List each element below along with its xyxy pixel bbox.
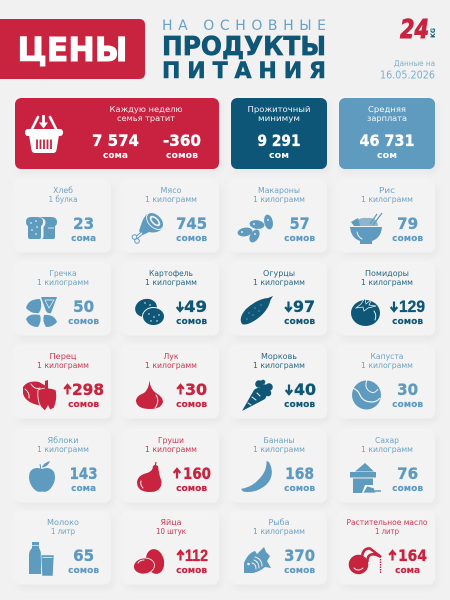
icon: buckwheat grains: [26, 297, 57, 327]
card: cucumbers: 97: [293, 297, 315, 316]
card: vegetable oil: 1 литр: [375, 527, 399, 536]
card: eggs: сомов: [176, 566, 208, 576]
card: apples: Яблоки: [48, 436, 78, 445]
card: vegetable oil: сома: [395, 566, 420, 576]
card: cucumbers: Огурцы: [263, 269, 295, 278]
card: tomatoes: [339, 264, 435, 336]
card: potatoes: сомов: [176, 317, 208, 327]
card: cucumbers: 1 килограмм: [253, 278, 305, 287]
card: pears: [123, 431, 219, 502]
card: fish: 1 килограмм: [253, 527, 305, 536]
card: sugar: [339, 431, 435, 502]
card: pasta: Макароны: [258, 186, 300, 195]
card: potatoes: 49: [184, 297, 207, 316]
card: carrots: 40: [294, 380, 316, 399]
card: apples: [15, 431, 111, 502]
card: pears: Груши: [158, 436, 184, 445]
card: sugar: 1 килограмм: [361, 445, 413, 454]
heading: на основные продукты питания: НА ОСНОВНЫЕ: [162, 18, 326, 34]
panel: subsistence minimum: [231, 98, 327, 169]
card: rice: 1 килограмм: [361, 195, 413, 204]
card: milk: Молоко: [47, 518, 79, 527]
card: rice: [339, 181, 435, 252]
card: eggs: 10 штук: [156, 527, 186, 536]
card: meat: 1 килограмм: [145, 195, 197, 204]
card: bread: 23: [73, 214, 94, 233]
icon: bell peppers: [23, 380, 57, 411]
card: bananas: сомов: [284, 484, 316, 494]
card: eggs: [123, 513, 219, 584]
icon: pear: [137, 462, 162, 492]
title block: ЦЕНЫ: [0, 19, 145, 79]
card: cabbage: 30: [397, 380, 418, 399]
card: potatoes: 1 килограмм: [145, 278, 197, 287]
card: cucumbers: [231, 264, 327, 336]
icon: apple: [29, 461, 55, 492]
card: bread: 1 булка: [48, 195, 78, 204]
card: vegetable oil: 164: [398, 546, 427, 565]
date note: [380, 59, 435, 82]
card: rice: Рис: [379, 186, 395, 195]
card: buckwheat: Гречка: [50, 269, 77, 278]
card: buckwheat: сомов: [68, 317, 100, 327]
card: pasta: 1 килограмм: [253, 195, 305, 204]
card: meat: Мясо: [160, 186, 182, 195]
card: cabbage: [339, 347, 435, 418]
stat: -360 сомов: сомов: [166, 151, 198, 161]
card: eggs: 112: [185, 546, 208, 565]
card: cabbage: сомов: [392, 400, 424, 410]
card: bananas: Бананы: [264, 436, 294, 445]
icon: cucumber: [241, 296, 273, 324]
arrow: up: [64, 385, 71, 394]
card: carrots: Морковь: [261, 352, 297, 361]
icon: oil flask pouring: [349, 548, 381, 574]
panel: subsistence minimum: Прожиточный: [248, 105, 310, 114]
card: onions: сомов: [176, 400, 208, 410]
card: bananas: [231, 431, 327, 502]
icon: potatoes: [133, 296, 164, 326]
text: каждую неделю семья тратит: семья тратит: [117, 114, 175, 123]
panel: average salary: сом: [377, 151, 397, 161]
panel: average salary: зарплата: [367, 114, 407, 123]
arrow: up: [177, 385, 184, 394]
card: meat: сомов: [176, 234, 208, 244]
card: peppers: Перец: [50, 352, 76, 361]
panel: average salary: [339, 98, 435, 169]
card: fish: [231, 513, 327, 584]
arrow: up: [389, 551, 396, 560]
icon: rice bowl: [350, 213, 382, 244]
card: milk: 65: [73, 546, 94, 565]
icon: onion: [136, 380, 163, 409]
card: bread: [15, 181, 111, 252]
icon: carrot: [242, 380, 273, 411]
panel: average salary: 46 731: [360, 131, 414, 150]
arrow: down: [391, 302, 397, 311]
card: pears: 1 килограмм: [145, 445, 197, 454]
panel: average salary: Средняя: [368, 105, 406, 114]
card: tomatoes: 1 килограмм: [361, 278, 413, 287]
card: rice: 79: [397, 214, 418, 233]
date note: Данные на: [394, 59, 435, 68]
card: peppers: 1 килограмм: [37, 361, 89, 370]
card: peppers: [15, 347, 111, 418]
panel: weekly family spending: [15, 98, 219, 169]
card: bread: Хлеб: [53, 186, 73, 195]
title block: ЦЕНЫ: ЦЕНЫ: [18, 30, 128, 69]
card: fish: Рыба: [268, 518, 290, 527]
icon: fish: [244, 547, 271, 573]
card: potatoes: [123, 264, 219, 336]
heading: на основные продукты питания: [162, 18, 326, 84]
text: каждую неделю семья тратит: [110, 105, 183, 123]
heading: на основные продукты питания: ПИТАНИЯ: [162, 59, 326, 84]
icon: banana: [241, 461, 272, 492]
card: onions: Лук: [164, 352, 179, 361]
card: bread: сома: [71, 234, 96, 244]
card: sugar: сомов: [392, 484, 424, 494]
card: fish: 370: [284, 546, 315, 565]
card: peppers: сомов: [68, 400, 100, 410]
card: pasta: 57: [290, 214, 310, 233]
card: bananas: 168: [285, 464, 314, 483]
stat: -360 сомов: [163, 131, 201, 161]
card: onions: 1 килограмм: [145, 361, 197, 370]
icon: eggs: [132, 547, 166, 576]
card: potatoes: Картофель: [149, 269, 193, 278]
card: sugar: 76: [397, 464, 418, 483]
arrow: down: [286, 384, 292, 394]
card: pears: сомов: [176, 484, 208, 494]
icon: bread: [26, 217, 57, 239]
icon: tomato: [351, 298, 380, 326]
heading: на основные продукты питания: ПРОДУКТЫ: [162, 32, 326, 62]
card: milk: [15, 513, 111, 584]
card: tomatoes: 129: [399, 297, 425, 316]
card: pasta: [231, 181, 327, 252]
arrow: up: [174, 469, 180, 478]
card: carrots: [231, 347, 327, 418]
stat: 7 574 сома: 7 574: [92, 131, 139, 150]
card: carrots: 1 килограмм: [253, 361, 305, 370]
card: buckwheat: 50: [73, 297, 94, 316]
logo: 24 KG: 24: [400, 15, 429, 45]
panel: subsistence minimum: сом: [269, 151, 289, 161]
card: meat: [123, 181, 219, 252]
card: bananas: 1 килограмм: [253, 445, 305, 454]
icon: macaroni: [237, 214, 274, 244]
icon: shopping basket: [25, 115, 63, 153]
card: cabbage: 1 килограмм: [361, 361, 413, 370]
arrow: up: [177, 551, 184, 560]
arrow: down: [177, 302, 183, 311]
card: eggs: Яйца: [160, 518, 182, 527]
panel: subsistence minimum: 9 291: [258, 131, 300, 150]
card: buckwheat: 1 килограмм: [37, 278, 89, 287]
card: vegetable oil: [339, 513, 435, 584]
card: cucumbers: сомов: [284, 317, 316, 327]
card: milk: сомов: [68, 566, 100, 576]
card: milk: 1 литр: [51, 527, 75, 536]
card: apples: 1 килограмм: [37, 445, 89, 454]
card: cabbage: Капуста: [370, 352, 404, 361]
icon: milk bottle and glass: [29, 542, 54, 576]
card: tomatoes: Помидоры: [365, 269, 409, 278]
card: apples: 143: [70, 464, 98, 483]
card: pasta: сомов: [284, 234, 316, 244]
icon: ham: [132, 209, 167, 243]
card: pears: 160: [183, 464, 211, 483]
card: sugar: Сахар: [375, 436, 399, 445]
card: meat: 745: [176, 214, 207, 233]
stat: 7 574 сома: [92, 131, 139, 161]
card: tomatoes: сомов: [392, 317, 424, 327]
icon: sugar sack: [350, 463, 381, 493]
card: onions: [123, 347, 219, 418]
card: onions: 30: [185, 380, 207, 399]
card: peppers: 298: [72, 380, 104, 399]
date note: 16.05.2026: [380, 68, 435, 82]
card: buckwheat: [15, 264, 111, 336]
card: vegetable oil: Растительное масло: [346, 518, 428, 527]
card: carrots: сомов: [284, 400, 316, 410]
stat: -360 сомов: -360: [163, 131, 201, 150]
card: fish: сомов: [284, 566, 316, 576]
text: каждую неделю семья тратит: Каждую неделю: [110, 105, 183, 114]
logo: 24 KG: KG: [429, 28, 437, 38]
arrow: down: [285, 302, 292, 311]
card: rice: сомов: [392, 234, 424, 244]
panel: subsistence minimum: минимум: [258, 114, 300, 123]
card: apples: сома: [71, 484, 96, 494]
icon: cabbage: [350, 380, 381, 410]
stat: 7 574 сома: сома: [103, 151, 128, 161]
